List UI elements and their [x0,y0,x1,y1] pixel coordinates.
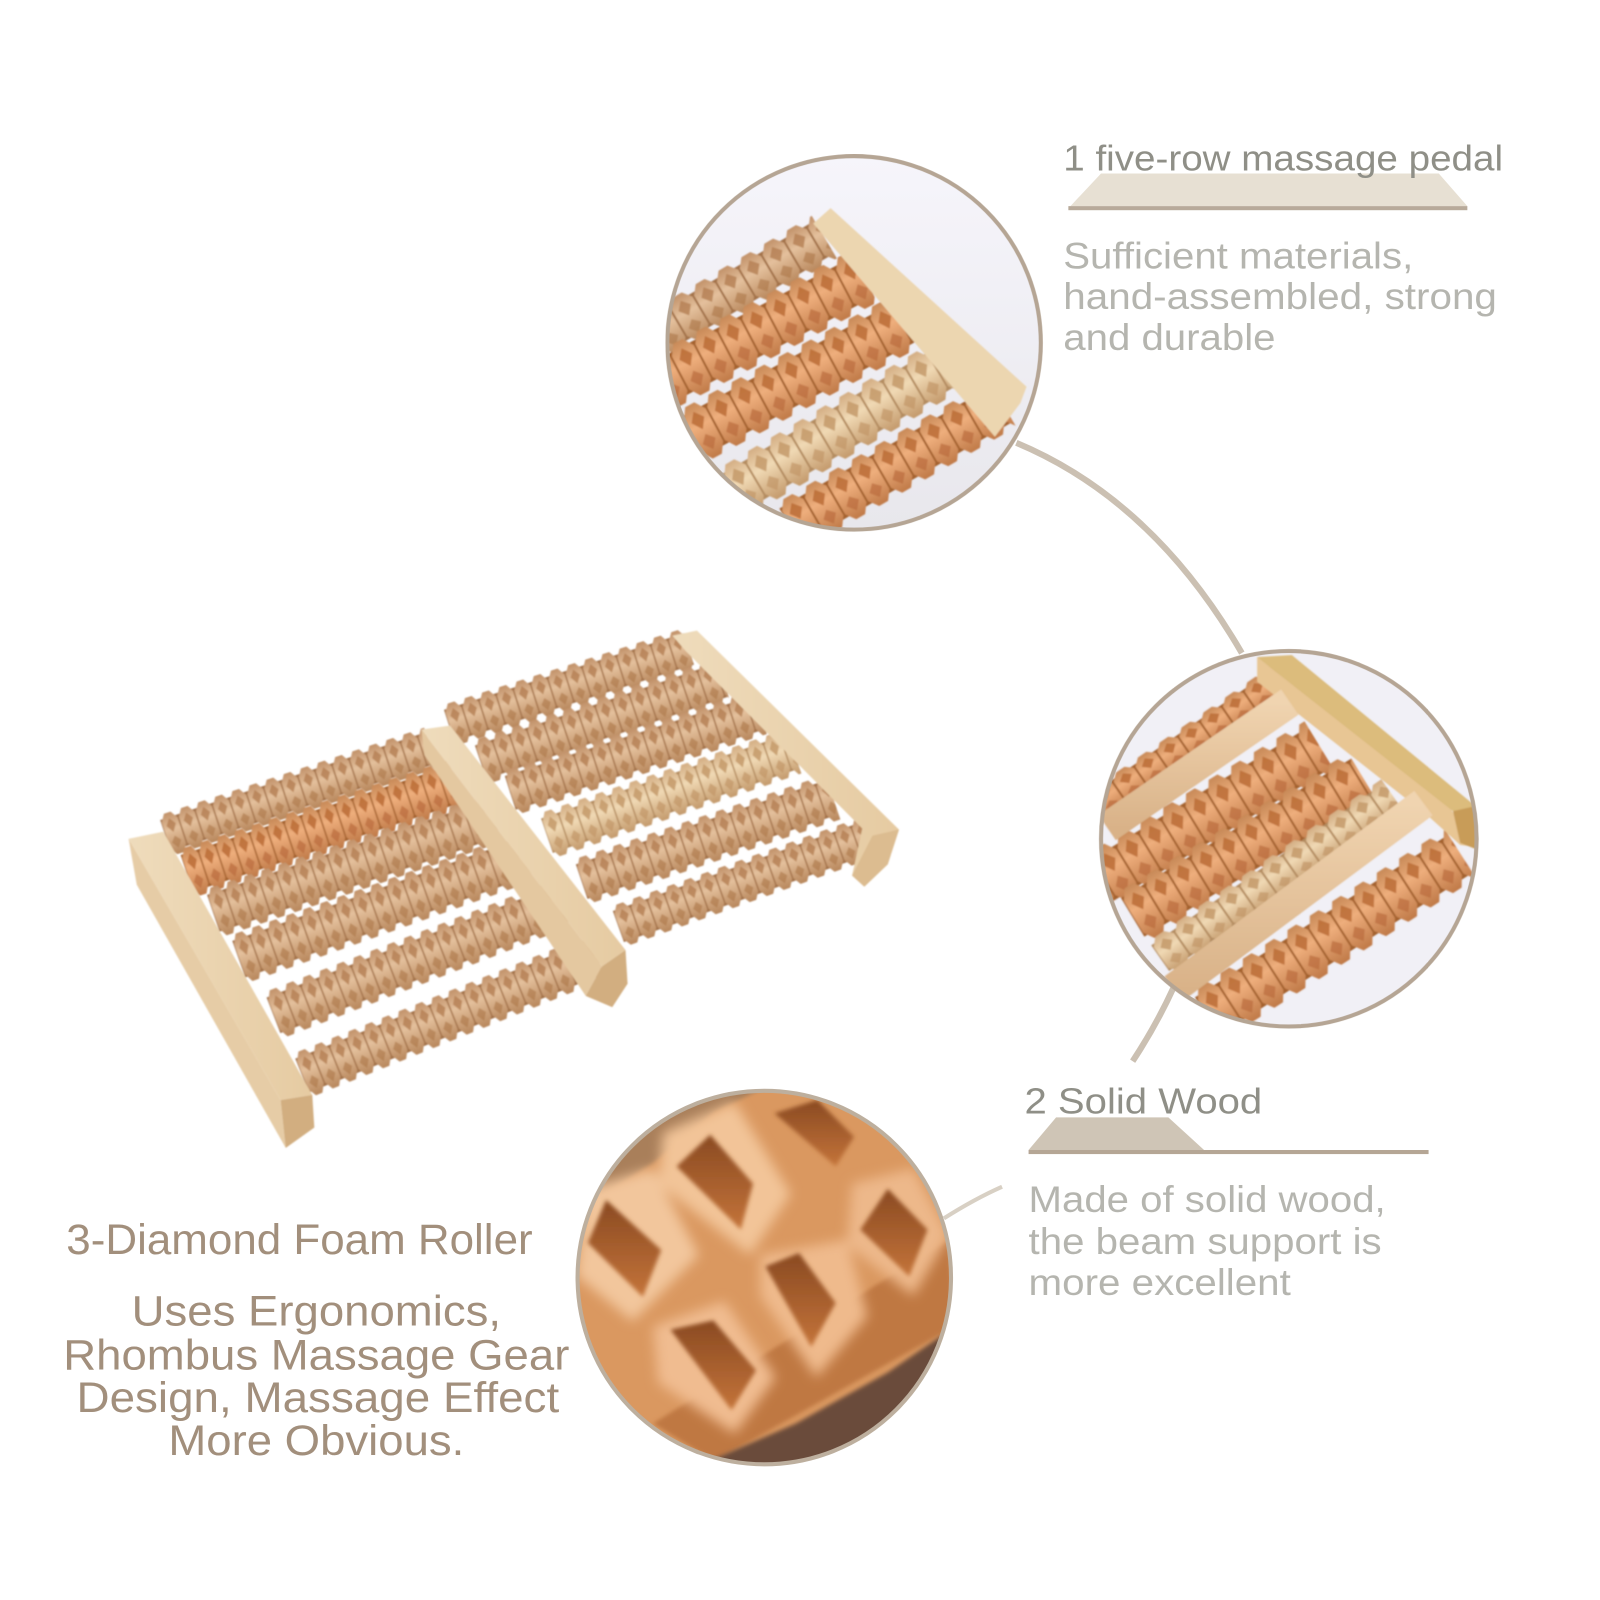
rollers: left section [158,727,606,1098]
connector line: detail three to solid wood text [944,1187,1002,1218]
detail circle 2: underside with dowels [1065,651,1477,1042]
upper-left backdrop [602,1093,756,1190]
dark table shadow [715,1334,940,1462]
wooden bar: far right [672,631,899,887]
wooden dowels [1107,702,1423,989]
lower groove band [653,1240,954,1461]
description: Uses Ergonomics, [132,1288,501,1336]
heading ribbon [1070,173,1467,206]
circle background [1101,651,1477,1027]
heading ribbon [1029,1117,1204,1150]
circle outline [1101,651,1477,1027]
detail circle 3: diamond bump close-up [571,1082,959,1480]
enlarged rollers [669,215,1016,528]
ribbon base line [1029,1150,1429,1154]
detail circle 1: top view of rollers [618,156,1041,551]
description: Rhombus Massage Gear [63,1331,569,1379]
ribbon base line [1068,206,1467,210]
description [1063,235,1497,358]
description: the beam support is [1029,1221,1382,1262]
description: and durable [1063,317,1276,358]
label block 3: diamond foam roller [63,1216,569,1465]
underside rollers [1102,676,1472,1022]
wooden bar: middle [421,726,628,1007]
heading: 1 five-row massage pedal [1063,138,1503,178]
circle outline [667,156,1041,530]
label block 1: five-row massage pedal [1063,138,1503,358]
description: Made of solid wood, [1029,1179,1386,1220]
enlarged wooden bar [813,208,1027,437]
description: hand-assembled, strong [1063,276,1497,317]
description: Design, Massage Effect [77,1374,559,1422]
wood base [580,1092,949,1458]
circle background [667,156,1041,530]
description [1029,1179,1386,1303]
description: Sufficient materials, [1063,235,1413,276]
wooden bar: near left [129,832,314,1148]
bump highlights [577,1102,949,1434]
product: full six-row wooden foot roller [129,628,899,1148]
heading: 2 Solid Wood [1024,1081,1262,1121]
description: more excellent [1029,1262,1291,1303]
heading: 3-Diamond Foam Roller [66,1216,533,1264]
end bar with cork-like top [1257,655,1476,849]
label block 2: solid wood [1024,1081,1429,1303]
connector line: detail one to detail two [1016,443,1242,653]
circle outline [578,1091,951,1464]
description [63,1288,569,1465]
rollers: right section [442,628,879,948]
connector line: detail two to solid wood heading [1133,988,1173,1061]
description: More Obvious. [168,1417,464,1465]
diamond recesses [588,1100,928,1410]
